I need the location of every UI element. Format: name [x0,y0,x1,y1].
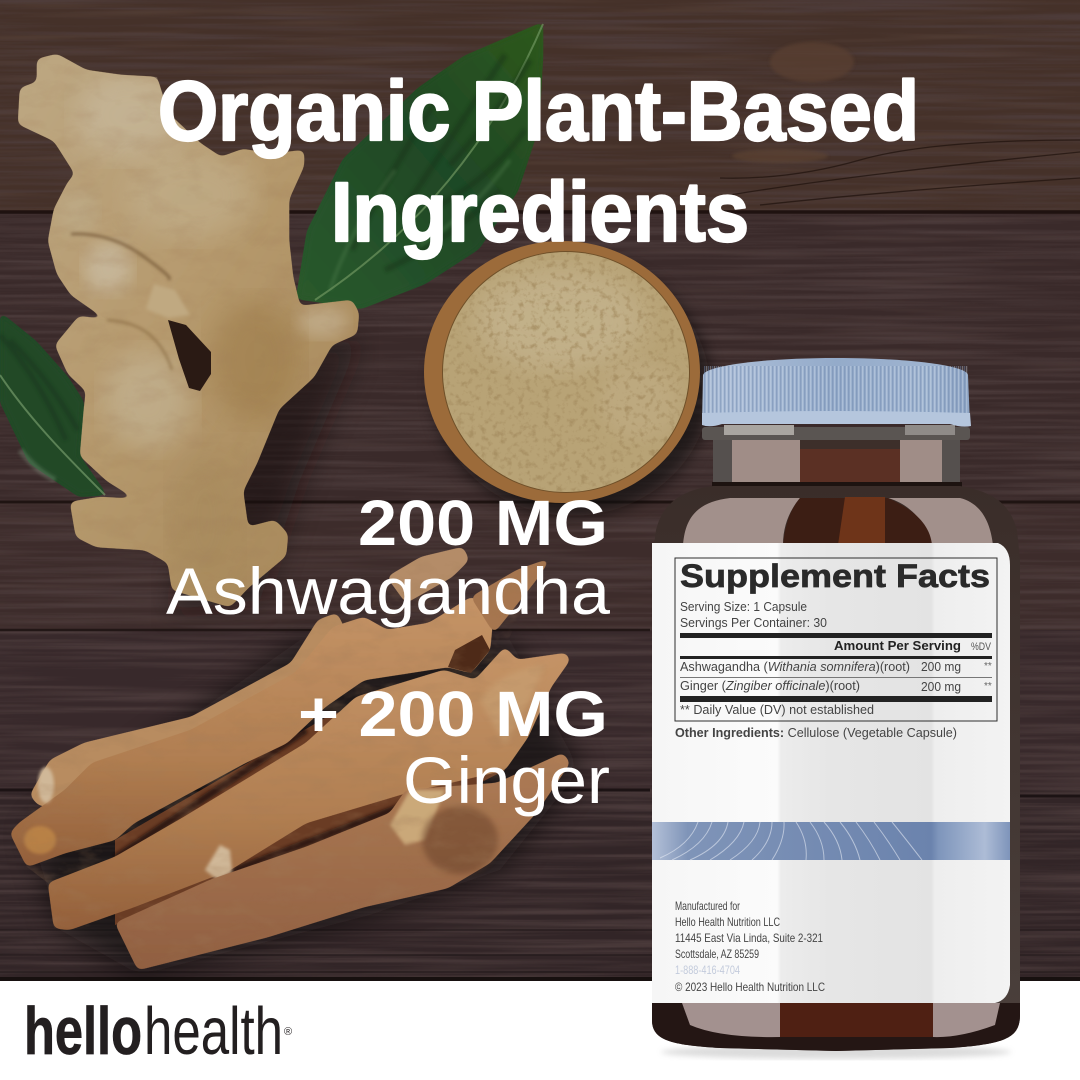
bottle ground shadow [661,1045,1011,1059]
supplement facts panel: Ginger (Zingiber officinale)(root) [680,679,860,693]
root: fingers at top [387,547,469,603]
manufacturer details [675,899,825,994]
bowl of ginger powder [424,241,710,516]
supplement facts panel: Ashwagandha (Withania somnifera)(root) [680,660,910,674]
title: Organic Plant-Based [158,64,919,158]
ginger dosage [298,678,610,817]
hellohealth logo: hello [24,994,142,1069]
ashwagandha dosage: 200 MG [358,487,608,559]
manufacturer details: © 2023 Hello Health Nutrition LLC [675,980,825,994]
leaf: upper right of ginger [296,22,543,309]
supplement facts panel: Serving Size: 1 Capsule [680,599,807,614]
ginger crease and hole [168,320,211,391]
supplement facts panel: Amount Per Serving [834,638,961,653]
ginger dosage: + 200 MG [298,678,608,750]
other ingredients: Other Ingredients: Cellulose (Vegetable Capsule) [675,725,957,740]
supplement facts panel: 200 mg [921,680,961,694]
supplement facts panel: Supplement Facts [680,558,990,594]
supplement facts panel: %DV [971,641,992,653]
ashwagandha dosage [166,487,610,628]
supplement bottle [652,358,1020,1059]
bottle base [652,1003,1020,1051]
hellohealth logo [24,994,292,1069]
supplement facts panel: ** [984,681,992,692]
root: bottom main [115,753,570,970]
title: Ingredients [331,165,749,259]
ginger root [0,40,370,620]
manufacturer details: Hello Health Nutrition LLC [675,915,780,929]
bottle body [652,486,1020,1051]
supplement facts panel [675,558,997,721]
bottom highlights [682,1003,780,1037]
hellohealth logo: ® [284,1026,292,1038]
decorative wave band [652,822,1010,860]
bottle cap [702,358,971,427]
supplement facts panel: Servings Per Container: 30 [680,615,827,630]
supplement facts panel: ** Daily Value (DV) not established [680,702,874,717]
manufacturer details: Manufactured for [675,899,740,913]
manufacturer details: 1-888-416-4704 [675,963,740,977]
leaf: left of ginger [0,312,107,497]
ashwagandha dosage: Ashwagandha [166,554,610,628]
supplement facts panel: ** [984,661,992,672]
root: back thin [30,613,350,810]
title [158,64,919,259]
supplement facts panel: 200 mg [921,660,961,674]
hellohealth logo: health [144,994,283,1069]
ginger dosage: Ginger [403,743,610,817]
white footer strip [0,981,1080,1080]
manufacturer details: Scottsdale, AZ 85259 [675,947,759,961]
bottle neck [702,425,970,488]
ashwagandha roots [0,540,580,980]
root: middle main [48,647,570,930]
product label [652,543,1010,1003]
shoulder highlights [683,498,800,545]
root: upper main [10,597,494,867]
manufacturer details: 11445 East Via Linda, Suite 2-321 [675,931,823,945]
